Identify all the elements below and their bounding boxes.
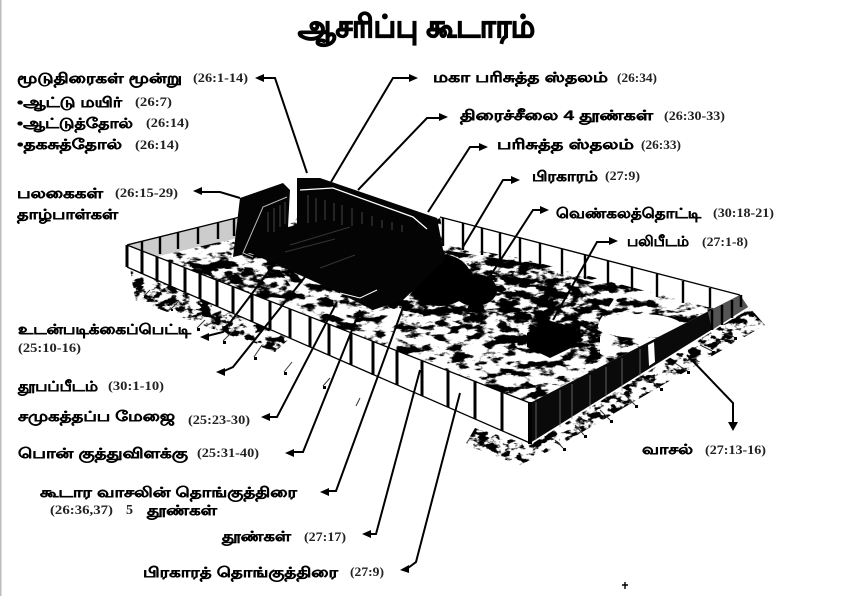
label: court: பிரகாரம்: [532, 168, 598, 184]
label: court: [532, 168, 640, 184]
arrow: incense altar: [216, 277, 305, 376]
label: lampstand: [18, 445, 259, 463]
label: tent door curtain: தூண்கள்: [146, 502, 217, 520]
label: ark: உடன்படிக்கைப்பெட்டி: [18, 321, 192, 338]
label: tent door curtain: கூடார வாசலின் தொங்குத்திரை: [40, 484, 298, 502]
label: tent door curtain: 5: [126, 503, 133, 518]
altar: [527, 320, 577, 358]
label: showbread table: (25:23-30): [188, 413, 250, 427]
label: goat skin: [17, 115, 189, 133]
label: pillars: [221, 528, 346, 546]
label: court curtain: (27:9): [350, 565, 384, 579]
label: showbread table: [18, 408, 250, 427]
right wall with entrance: [530, 295, 748, 444]
label: boards: பலகைகள்: [17, 185, 103, 201]
arrow: boards: [193, 187, 240, 198]
label: showbread table: சமுகத்தப்ப மேஜை: [18, 408, 175, 426]
label: goat hair: [17, 94, 172, 111]
label: veil: [460, 107, 725, 125]
label: altar: (27:1-8): [702, 235, 748, 249]
label: incense altar: தூபப்பீடம்: [17, 378, 98, 396]
label: goat hair: (26:7): [135, 95, 172, 109]
label: bars: தாழ்பாள்கள்: [17, 206, 118, 224]
label: holy place: [497, 136, 681, 154]
laver: [462, 285, 486, 312]
label: boards: (26:15-29): [115, 186, 178, 200]
floor: [157, 217, 714, 400]
label: goat skin: •ஆட்டுத்தோல்: [17, 115, 133, 133]
label: badger skin: •தகசுத்தோல்: [17, 136, 122, 154]
label: most holy place: மகா பரிசுத்த ஸ்தலம்: [433, 69, 608, 87]
arrow: pillars: [362, 370, 420, 538]
label: court curtain: பிரகாரத் தொங்குத்திரை: [143, 564, 339, 582]
arrow: court: [463, 176, 520, 247]
arrow: showbread table: [261, 302, 337, 421]
label: gate: (27:13-16): [705, 443, 766, 457]
label: ark: [18, 321, 192, 355]
label: gate: [642, 441, 766, 457]
arrow: veil: [358, 113, 448, 190]
arrow: most holy place: [331, 74, 418, 182]
label: laver: (30:18-21): [713, 206, 774, 220]
label: badger skin: (26:14): [135, 138, 179, 152]
label: laver: வெண்கலத்தொட்டி: [556, 205, 702, 223]
speck: [622, 582, 628, 589]
label: tent door curtain: [40, 484, 298, 520]
label: court curtain: [143, 564, 384, 582]
arrow: tent door curtain: [320, 302, 405, 496]
label: gate: வாசல்: [642, 441, 693, 457]
diagram: tabernacle courtyard: [120, 178, 780, 480]
label: lampstand: பொன் குத்துவிளக்கு: [18, 445, 189, 463]
label: goat hair: •ஆட்டு மயிர்: [17, 94, 123, 111]
label: pillars: தூண்கள்: [221, 528, 291, 546]
ground shadow and pegs: [130, 270, 765, 465]
arrow: laver: [483, 206, 549, 287]
label: pillars: (27:17): [304, 530, 346, 544]
label: veil: (26:30-33): [664, 109, 725, 123]
back wall left: [127, 217, 240, 258]
label: laver: [556, 205, 774, 223]
scan edge: [0, 0, 2, 596]
label: three coverings: [17, 70, 248, 88]
label: goat skin: (26:14): [146, 116, 189, 130]
arrow: holy place: [428, 143, 488, 212]
label: most holy place: [433, 69, 657, 87]
arrow: court curtain: [400, 393, 460, 573]
label: altar: [627, 233, 748, 249]
arrow: three coverings: [255, 74, 307, 173]
label: incense altar: (30:1-10): [108, 379, 164, 393]
tent of meeting: [233, 178, 445, 310]
label: ark: (25:10-16): [18, 341, 81, 355]
label: tent door curtain: (26:36,37): [50, 503, 113, 517]
label: boards: [17, 185, 178, 201]
arrow: altar: [553, 237, 618, 320]
label: three coverings: மூடுதிரைகள் மூன்று: [17, 70, 182, 88]
label: altar: பலிபீடம்: [627, 233, 689, 249]
label: incense altar: [17, 378, 164, 396]
label: holy place: பரிசுத்த ஸ்தலம்: [497, 136, 634, 154]
label: court: (27:9): [605, 169, 640, 183]
label: lampstand: (25:31-40): [197, 446, 259, 460]
label: veil: திரைச்சீலை 4 தூண்கள்: [460, 107, 653, 125]
front wall: [127, 245, 530, 443]
arrow: lampstand: [285, 310, 360, 457]
title: ஆசரிப்பு கூடாரம்: [298, 9, 535, 47]
label: three coverings: (26:1-14): [193, 71, 248, 85]
label: most holy place: (26:34): [617, 71, 657, 85]
back wall right: [440, 217, 740, 310]
arrow: ark: [200, 263, 275, 341]
arrow: gate: [687, 355, 738, 431]
label: badger skin: [17, 136, 179, 154]
label: holy place: (26:33): [641, 138, 681, 152]
